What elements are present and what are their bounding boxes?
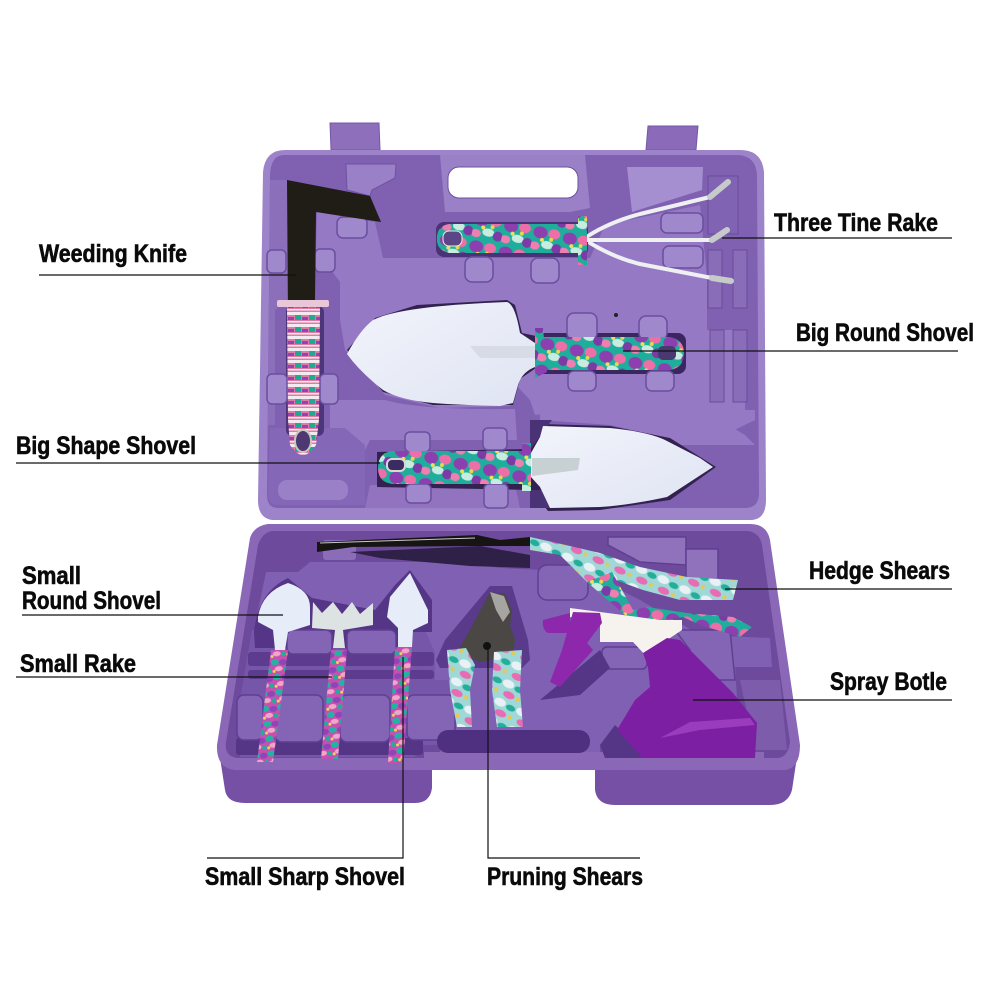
label: Small: Small (22, 562, 81, 590)
recess floor (278, 480, 348, 500)
square pads (237, 537, 735, 742)
handle (321, 650, 347, 759)
blade (531, 426, 713, 508)
raised plate (316, 205, 755, 442)
hub (483, 642, 491, 650)
blade top (317, 535, 530, 552)
three tine rake (437, 182, 731, 281)
handle (257, 650, 288, 762)
skirt right (595, 750, 798, 805)
nozzle (543, 613, 570, 633)
hedge shears (317, 535, 752, 637)
bottom left recess (268, 428, 365, 505)
label: Weeding Knife: Weeding Knife (39, 240, 187, 268)
bottom strip plate (365, 485, 520, 508)
raised face (250, 562, 772, 758)
bottle body (617, 638, 757, 758)
tool dark slots (286, 222, 716, 511)
small tool plate (240, 630, 455, 757)
bottom case tray (217, 524, 800, 805)
skirt left (218, 745, 432, 803)
handle hole (448, 167, 578, 198)
shears recess (436, 586, 530, 668)
trigger shadow (540, 650, 610, 700)
shovel handle (541, 337, 684, 370)
small round shovel (257, 583, 310, 762)
top case lid (258, 123, 766, 520)
center bottom strip (424, 752, 764, 762)
sprayer head (570, 608, 682, 657)
upper handle (530, 537, 738, 600)
right corner recess (740, 680, 787, 750)
lid outer shell (258, 150, 766, 520)
shovel blade (347, 302, 535, 406)
left handle (447, 648, 475, 727)
big round shovel (347, 302, 684, 406)
small sharp shovel (387, 573, 428, 763)
blade (457, 592, 515, 662)
label: Big Shape Shovel: Big Shape Shovel (16, 432, 196, 460)
tray rim (217, 524, 800, 770)
lower recess (236, 738, 423, 755)
rake handle loop (443, 231, 462, 246)
latch left (330, 123, 380, 150)
blade highlight (470, 346, 535, 358)
blade highlight (532, 458, 580, 476)
upper left block (346, 164, 396, 196)
pruning shears (447, 592, 523, 727)
label: Small Rake: Small Rake (20, 650, 136, 678)
dark band 1 (248, 652, 434, 666)
knife blade (287, 180, 381, 300)
big shape shovel (378, 426, 713, 508)
right channel (708, 176, 747, 402)
leader lines (16, 238, 958, 858)
bottle side recess (600, 725, 650, 758)
shovel collar (535, 328, 547, 378)
right handle (492, 650, 523, 727)
label: Small Sharp Shovel: Small Sharp Shovel (205, 863, 405, 891)
rake handle (437, 224, 578, 253)
handle (378, 451, 524, 484)
dark blade shadow (350, 546, 530, 568)
lower handle (587, 572, 752, 637)
knife guard (277, 300, 329, 307)
knife handle loop (295, 430, 311, 452)
trigger (550, 612, 602, 687)
blade shine (320, 538, 475, 543)
label: Hedge Shears: Hedge Shears (809, 557, 950, 585)
dark band 2 (248, 670, 434, 679)
knife handle (287, 307, 320, 455)
lid inner tray (267, 155, 759, 508)
upper right block (627, 167, 703, 212)
label: Spray Botle: Spray Botle (830, 668, 947, 696)
blade shine (490, 592, 510, 622)
rake collar (578, 216, 587, 265)
dark tool recess (254, 570, 432, 648)
left column plate (268, 180, 287, 425)
label: Pruning Shears: Pruning Shears (487, 863, 643, 891)
tray inner (226, 531, 790, 758)
blade (258, 583, 310, 650)
handle housing (440, 155, 590, 212)
rake head (312, 602, 373, 648)
tiny hole (614, 313, 618, 317)
knobs (267, 213, 703, 508)
bottle highlight (660, 718, 755, 738)
label: Round Shovel: Round Shovel (22, 587, 161, 615)
label: Three Tine Rake: Three Tine Rake (774, 209, 938, 237)
collar (522, 443, 531, 491)
latch right (646, 126, 698, 150)
lower central plate (330, 400, 517, 450)
blade (387, 573, 428, 647)
hole (387, 459, 405, 471)
handle (388, 647, 412, 763)
weeding knife (277, 180, 381, 455)
handle hole (658, 346, 676, 360)
carry slot (437, 730, 590, 753)
spray bottle (543, 608, 757, 758)
lower right plate (540, 408, 755, 445)
small rake (312, 602, 373, 759)
rake tines (588, 182, 731, 281)
